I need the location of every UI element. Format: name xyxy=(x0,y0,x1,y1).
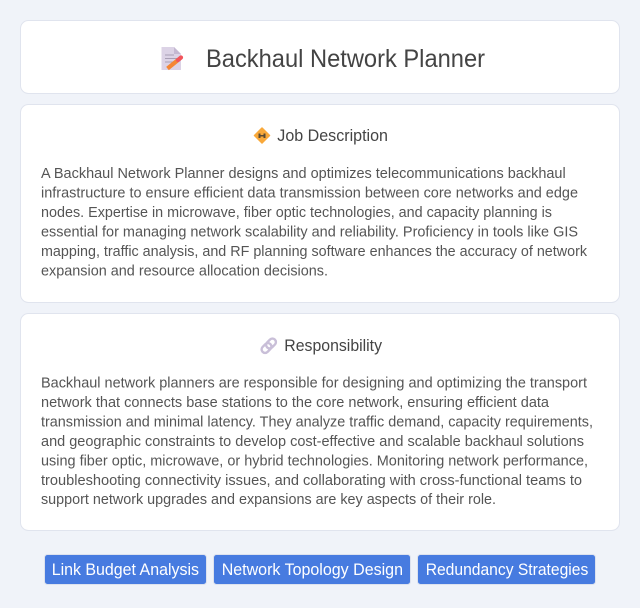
text block: responsibility: and geographic constraints to develop cost-effective and scalable backhaul solutions xyxy=(41,434,584,450)
text block: responsibility: support network upgrades and expansions are key aspects of their role. xyxy=(41,492,496,508)
icon: chain link xyxy=(260,337,277,354)
tag: link budget analysis xyxy=(44,554,206,584)
tag: network topology design xyxy=(214,554,410,584)
text block: responsibility: troubleshooting connectivity issues, and collaborating with cross-functional teams to xyxy=(41,473,582,489)
panel: job description xyxy=(20,104,620,302)
text block: responsibility: network that connects base stations to the core network, ensuring efficient data xyxy=(41,395,550,411)
panel: responsibility xyxy=(20,314,620,530)
icon: document with pencil xyxy=(162,47,181,70)
icon: diamond sign xyxy=(254,128,270,143)
text block: job description xyxy=(41,166,588,280)
text block: job description: infrastructure to ensure efficient data transmission between core networks and edge xyxy=(41,186,578,202)
tag: redundancy strategies xyxy=(418,554,596,584)
text block: responsibility xyxy=(41,376,593,508)
title: Backhaul Network Planner xyxy=(206,45,485,73)
text block: job description: essential for managing network scalability and reliability. Proficiency in tools like GIS xyxy=(41,224,578,240)
text block: job description: A Backhaul Network Planner designs and optimizes telecommunications backhaul xyxy=(41,166,566,182)
panel: title card xyxy=(20,20,620,94)
text block: job description: nodes. Expertise in microwave, fiber optic technologies, and capacity planning is xyxy=(41,205,552,221)
heading: job description: Job Description xyxy=(277,126,388,145)
text block: responsibility: using fiber optic, microwave, or hybrid technologies. Monitoring network performance, xyxy=(41,454,588,470)
text block: job description: expansion and resource allocation decisions. xyxy=(41,264,328,280)
tag: redundancy strategies: Redundancy Strategies xyxy=(426,561,588,579)
text block: job description: mapping, traffic analysis, and RF planning software enhances the accuracy of network xyxy=(41,244,588,260)
heading: responsibility: Responsibility xyxy=(284,336,383,355)
tag: network topology design: Network Topology Design xyxy=(222,561,403,579)
tag: link budget analysis: Link Budget Analysis xyxy=(52,561,199,579)
text block: responsibility: Backhaul network planners are responsible for designing and optimizing the transport xyxy=(41,376,587,392)
text block: responsibility: transmission and minimal latency. They analyze traffic demand, capacity requirements, xyxy=(41,414,593,430)
